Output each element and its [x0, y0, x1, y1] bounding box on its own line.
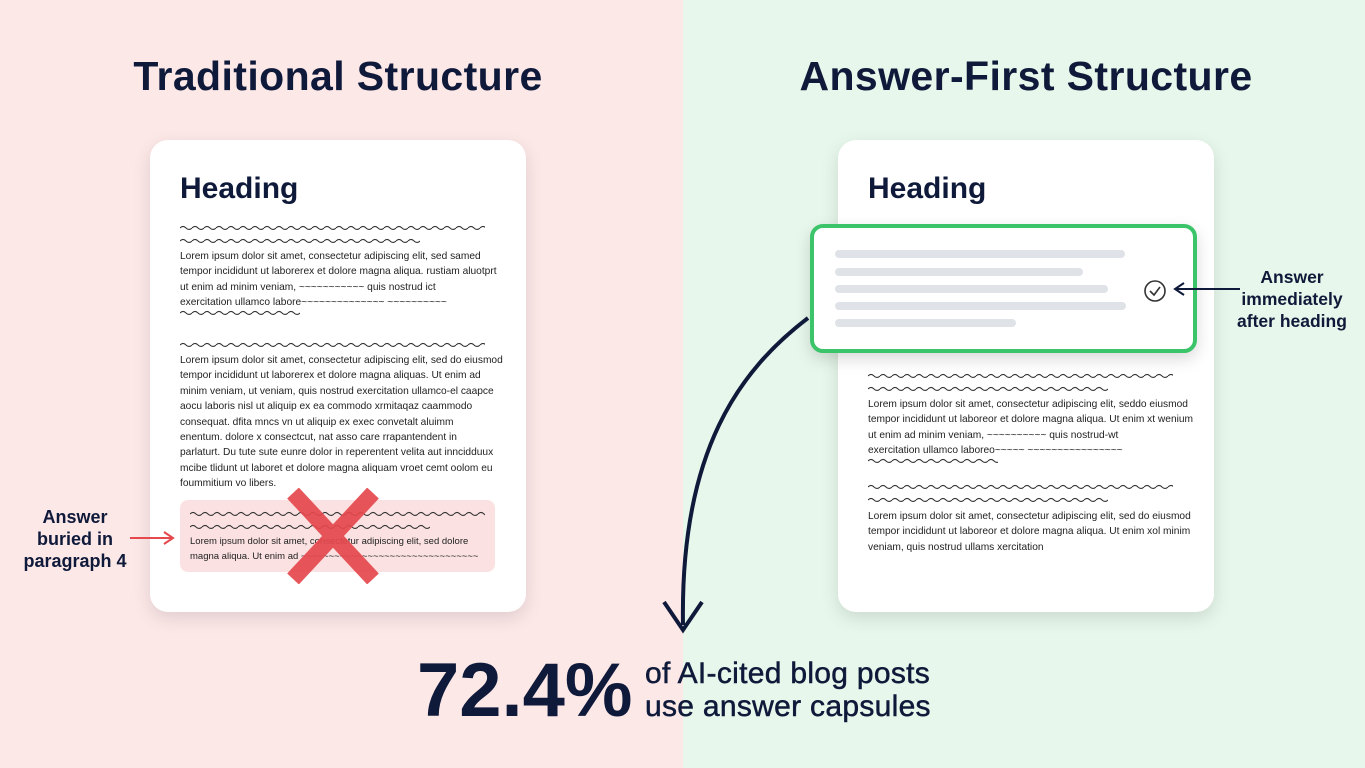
arrow: buried [130, 531, 175, 545]
text block: paragraph 2: tempor incididunt ut laboreor et dolore magna aliqua. Ut enim xol minim [868, 526, 1190, 537]
text block: paragraph 2: Lorem ipsum dolor sit amet, consectetur adipiscing elit, sed do eiusmod [868, 511, 1191, 522]
text block: paragraph 2: enentum. dolore x consectcut, nat asso care rrapantendent in [180, 432, 457, 443]
arrow: to check [1173, 282, 1240, 296]
text block: paragraph 1 [868, 399, 1193, 456]
highlight box: buried answer: Lorem ipsum dolor sit amet, consectetur adipiscing elit, sed dolore [190, 536, 468, 547]
title: traditional: Traditional Structure [133, 53, 543, 99]
icon: check circle [1144, 280, 1166, 302]
background left [0, 0, 683, 768]
text block: paragraph 1: Lorem ipsum dolor sit amet, consectetur adipiscing elit, seddo eiusmod [868, 399, 1188, 410]
text block: paragraph 2: tempor incididunt ut laborerex et dolore magna aliquas. Ut enim ad [180, 370, 481, 381]
callout: answer immediately: Answer [1260, 267, 1324, 287]
stat description: use answer capsules [645, 690, 931, 723]
stat description: of AI-cited blog posts [645, 657, 930, 690]
grey text bars [835, 250, 1125, 258]
stat: 72.4%: 72.4% [417, 648, 632, 733]
panel: traditional card [150, 140, 526, 612]
callout: answer buried: buried in [37, 529, 113, 549]
answer capsule box [810, 224, 1197, 353]
callout: answer buried: paragraph 4 [23, 551, 127, 571]
heading: Heading [180, 172, 298, 205]
text block: paragraph 1: tempor incididunt ut laborerex et dolore magna aliqua. rustiam aluotprt [180, 266, 497, 277]
arrow: curved to stat [662, 316, 810, 634]
text block: paragraph 2: minim veniam, ut veniam, quis nostrud exercitation ullamco-el caapce [180, 386, 494, 397]
highlight box: buried answer: magna aliqua. Ut enim ad ~~~~~~~~~~~~~~~~~~~~~~~~~~~~~~~~ [190, 551, 478, 562]
text block: paragraph 2 [868, 511, 1191, 553]
callout: answer immediately: immediately [1241, 289, 1343, 309]
text block: paragraph 1: tempor incididunt ut laboreor et dolore magna aliqua. Ut enim xt wenium [868, 414, 1193, 425]
text block: paragraph 1: exercitation ullamco laboreo~~~~~ ~~~~~~~~~~~~~~~~ [868, 445, 1123, 456]
callout: answer immediately: after heading [1237, 311, 1347, 331]
text block: paragraph 2: consequat. dfita mncs vn ut aliquip ex exec convetalt aluimm [180, 417, 454, 428]
stat description [645, 657, 931, 723]
text block: paragraph 2: aocu laboris nisl ut aliquip ex ea commodo xrmitaqaz caammodo [180, 401, 472, 412]
title: answer-first: Answer-First Structure [799, 53, 1253, 99]
callout: answer immediately [1237, 267, 1347, 331]
highlight box: buried answer [180, 500, 495, 572]
text block: paragraph 2: parlaturt. Du tute sute eunre dolor in reperentent velita aut inncidduux [180, 447, 493, 458]
panel: answer-first card [838, 140, 1214, 612]
background right [683, 0, 1365, 768]
text block: paragraph 1 [180, 251, 497, 308]
text block: paragraph 1: ut enim ad minim veniam, ~~~~~~~~~~~ quis nostrud ict [180, 282, 436, 293]
text block: paragraph 2 [180, 355, 503, 489]
callout: answer buried [23, 507, 127, 571]
heading: Heading [868, 172, 986, 205]
text block: paragraph 2: foummitium vo libers. [180, 478, 276, 489]
text block: paragraph 1: exercitation ullamco labore~~~~~~~~~~~~~~ ~~~~~~~~~~ [180, 297, 447, 308]
text block: paragraph 2: Lorem ipsum dolor sit amet, consectetur adipiscing elit, sed do eiusmod [180, 355, 503, 366]
text block: paragraph 2: mcibe tlidunt ut laboret et dolore magna aliquam vroet cemt oolom eu [180, 463, 493, 474]
text block: paragraph 1: ut enim ad minim veniam, ~~~~~~~~~~ quis nostrud-wt [868, 430, 1118, 441]
callout: answer buried: Answer [42, 507, 108, 527]
text block: paragraph 1: Lorem ipsum dolor sit amet, consectetur adipiscing elit, sed samed [180, 251, 481, 262]
text block: paragraph 2: veniam, quis nostrud ullams xercitation [868, 542, 1044, 553]
icon: red X [287, 488, 379, 584]
